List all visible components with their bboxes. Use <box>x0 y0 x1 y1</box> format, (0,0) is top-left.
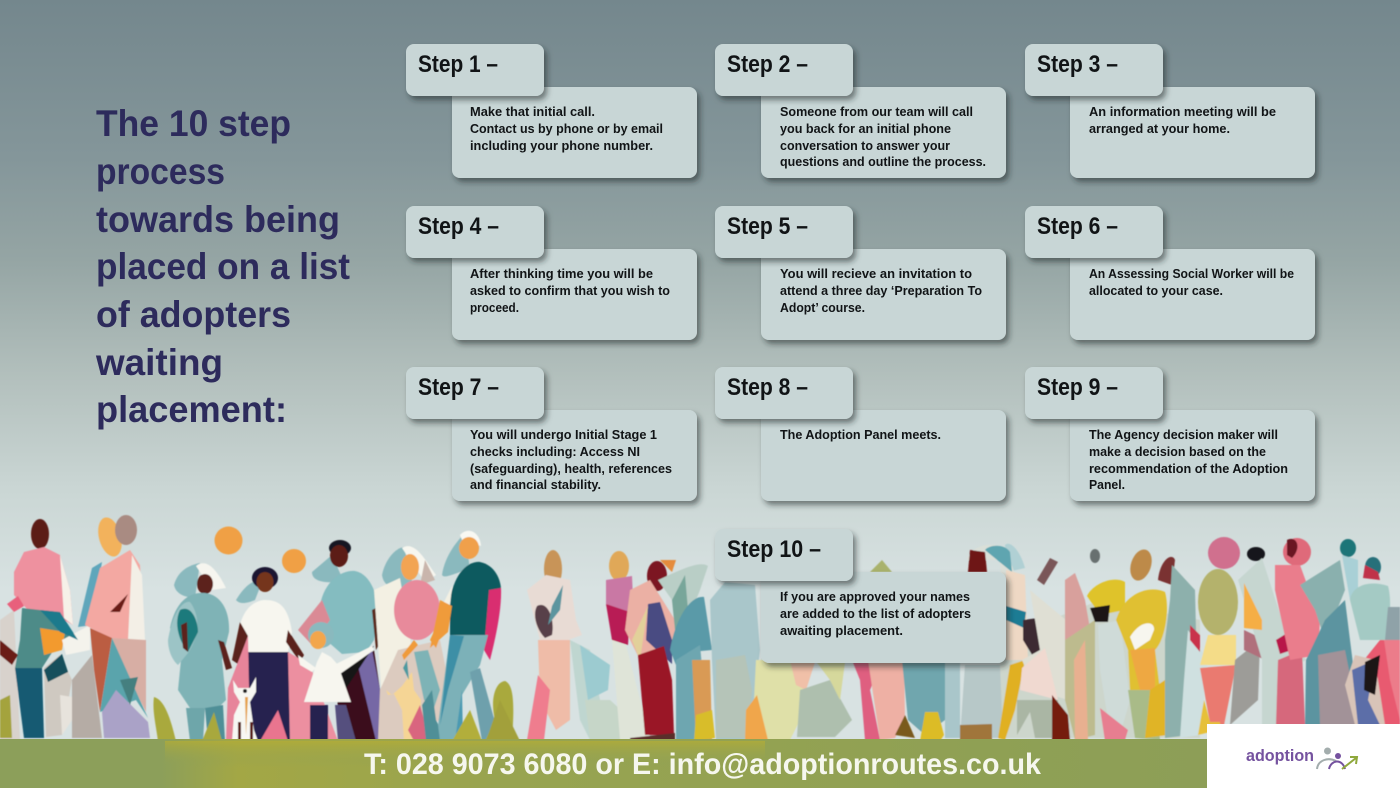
step 4 card: After thinking time you will be <box>470 266 653 281</box>
crowd centre <box>527 544 1025 741</box>
step 8 card: Step 8 – <box>727 374 808 401</box>
title: The 10 step <box>96 103 291 144</box>
person: man in teal t-shirt <box>298 540 390 741</box>
step 10 card: are added to the list of adopters <box>780 606 971 621</box>
person: sage and teal tall figures <box>658 564 708 620</box>
step 2 card: conversation to answer your <box>780 138 950 153</box>
title: placed on a list <box>96 246 350 287</box>
crowd right <box>960 537 1400 741</box>
step 3 card: Step 3 – <box>1037 51 1118 78</box>
step 5 card: Adopt’ course. <box>780 300 865 315</box>
step 4 card <box>406 206 697 340</box>
step 8 card: The Adoption Panel meets. <box>780 427 941 442</box>
step 7 card: checks including: Access NI <box>470 444 640 459</box>
step 7 card: Step 7 – <box>418 374 499 401</box>
step 6 card <box>1025 206 1315 340</box>
logo box <box>1207 724 1400 788</box>
step 7 card: and financial stability. <box>470 477 601 492</box>
person: small child in white dress <box>298 622 374 741</box>
step 2 card: questions and outline the process. <box>780 154 986 169</box>
step 7 card <box>406 367 697 501</box>
icon: adoption routes people and arrow <box>1317 748 1357 769</box>
step 4 card: Step 4 – <box>418 213 499 240</box>
background hint above step 10 <box>870 560 892 572</box>
icon: cream dog <box>386 660 446 741</box>
plant left <box>153 697 176 741</box>
step 1 card: Make that initial call. <box>470 104 595 119</box>
step 2 card: you back for an initial phone <box>780 121 951 136</box>
title: towards being <box>96 199 340 240</box>
step 6 card: allocated to your case. <box>1089 283 1223 298</box>
ground strip <box>0 739 1400 788</box>
person: second pink figure with orange head <box>72 515 150 738</box>
step 3 card: An information meeting will be <box>1089 104 1276 119</box>
step 9 card: recommendation of the Adoption <box>1089 461 1288 476</box>
step 10 card: awaiting placement. <box>780 623 903 638</box>
step 1 card <box>406 44 697 178</box>
title: waiting <box>95 342 223 383</box>
step 9 card: Panel. <box>1089 477 1125 492</box>
step 6 card: An Assessing Social Worker will be <box>1089 266 1294 281</box>
person: far left pink figure <box>0 519 90 740</box>
person: cream and yellow lower figures <box>752 660 810 740</box>
step 2 card <box>715 44 1006 178</box>
step 7 card: (safeguarding), health, references <box>470 461 672 476</box>
step 9 card: Step 9 – <box>1037 374 1118 401</box>
step 5 card: You will recieve an invitation to <box>780 266 972 281</box>
step 5 card <box>715 206 1006 340</box>
step 9 card: make a decision based on the <box>1089 444 1266 459</box>
person: yellow head magenta figure <box>609 551 629 581</box>
logo box: adoption <box>1246 746 1314 765</box>
contact line: T: 028 9073 6080 or E: info@adoptionroutes.co.uk <box>364 748 1041 781</box>
step 10 card: Step 10 – <box>727 536 821 563</box>
person: man in dark green shirt walking <box>430 531 520 741</box>
step 3 card <box>1025 44 1315 178</box>
step 2 card: Step 2 – <box>727 51 808 78</box>
step 1 card: Contact us by phone or by email <box>470 121 663 136</box>
step 1 card: including your phone number. <box>470 138 653 153</box>
step 10 card <box>715 529 1006 663</box>
step 1 card: Step 1 – <box>418 51 498 78</box>
step 5 card: Step 5 – <box>727 213 808 240</box>
title: of adopters <box>96 294 291 335</box>
title <box>95 103 350 430</box>
step 9 card: The Agency decision maker will <box>1089 427 1278 442</box>
step 2 card: Someone from our team will call <box>780 104 973 119</box>
step 9 card <box>1025 367 1315 501</box>
step 4 card: proceed. <box>470 300 519 315</box>
orange balls <box>214 526 306 573</box>
step 3 card: arranged at your home. <box>1089 121 1230 136</box>
person: tan head figure <box>544 550 562 588</box>
step 10 card: If you are approved your names <box>780 589 970 604</box>
step 5 card: attend a three day ‘Preparation To <box>780 283 982 298</box>
step 8 card <box>715 367 1006 501</box>
icon: white dog <box>232 677 258 741</box>
person: dark red standing <box>647 561 667 591</box>
title: process <box>96 151 225 192</box>
step 4 card: asked to confirm that you wish to <box>470 283 670 298</box>
person: woman in white top and navy skirt <box>226 567 338 741</box>
person: woman in pink sweater <box>374 546 450 741</box>
person: teal woman with white hair <box>168 563 232 741</box>
step 7 card: You will undergo Initial Stage 1 <box>470 427 657 442</box>
title: placement: <box>96 389 287 430</box>
illustration: crowd of people <box>0 515 1400 741</box>
step 6 card: Step 6 – <box>1037 213 1118 240</box>
